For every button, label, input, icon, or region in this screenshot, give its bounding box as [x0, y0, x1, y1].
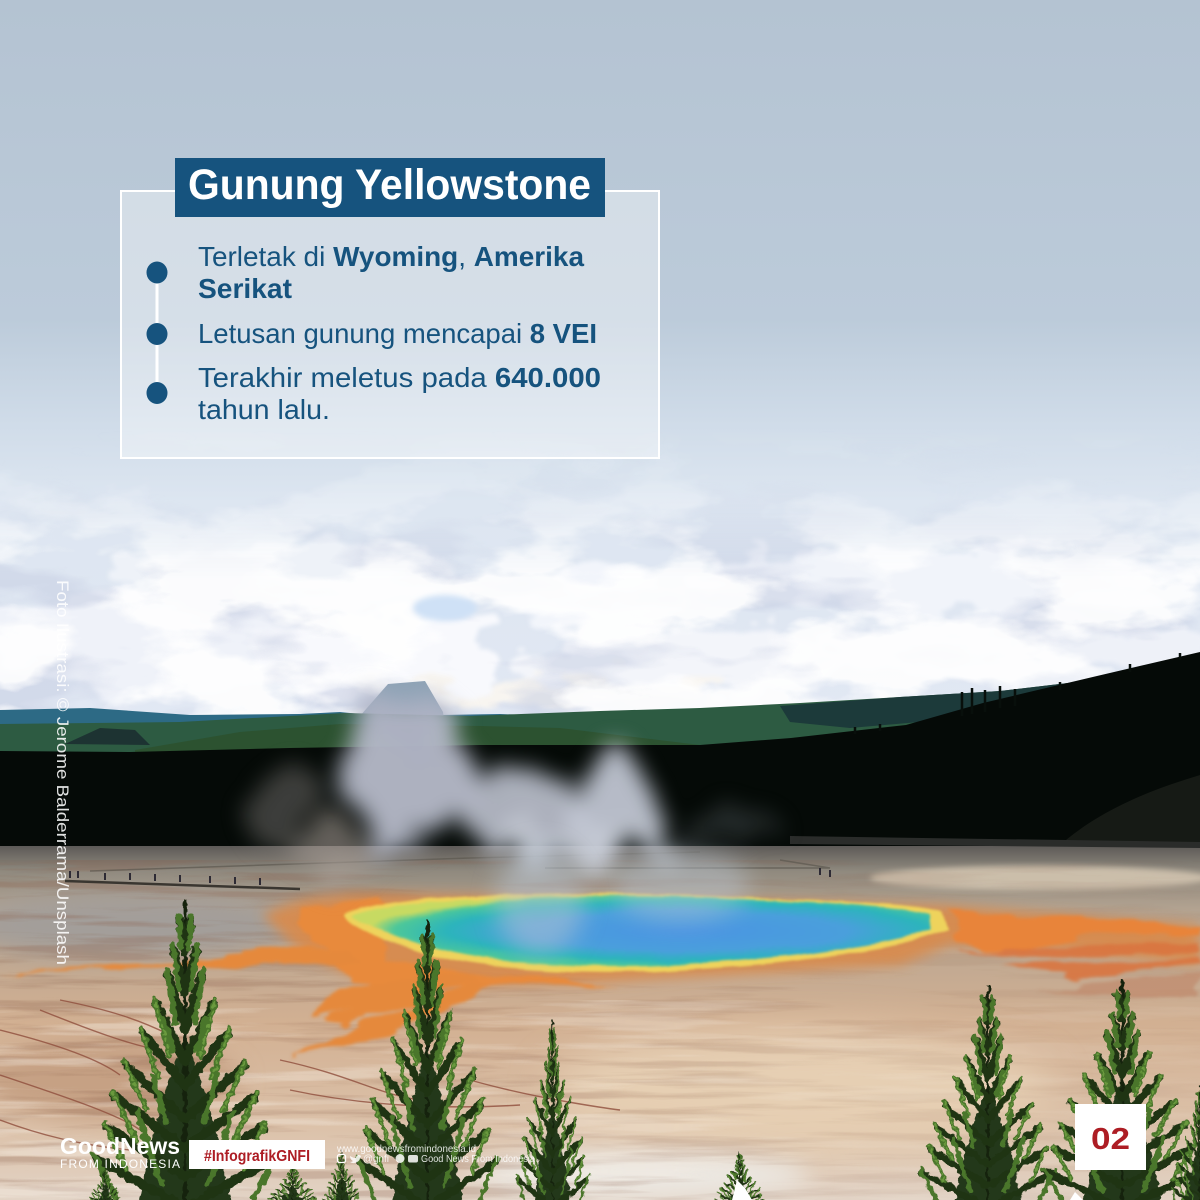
hashtag badge: #InfografikGNFI [204, 1148, 310, 1165]
timeline bullets [146, 262, 168, 404]
dark forest [0, 652, 1200, 854]
green hills [0, 681, 1085, 800]
page number [1075, 1104, 1146, 1170]
steam plumes [253, 699, 770, 890]
social links [336, 1143, 535, 1165]
icon: instagram [338, 1154, 346, 1162]
fact: eruption scale: Letusan gunung mencapai 8 VEI [198, 318, 597, 349]
fact: last eruption [198, 362, 601, 425]
footer logo [60, 1133, 180, 1171]
card frame [121, 191, 659, 458]
sky [0, 0, 1200, 760]
photo background: Grand Prismatic Spring [0, 325, 1200, 1200]
fact: location [198, 241, 584, 304]
icon: twitter [350, 1155, 361, 1163]
fact: last eruption: tahun lalu. [198, 394, 330, 425]
fact: location: Terletak di Wyoming, Amerika [198, 241, 584, 272]
hashtag badge [189, 1140, 325, 1169]
steam veil over pool [495, 845, 750, 955]
orange bacterial mat [0, 893, 1200, 1060]
ground [0, 846, 1200, 1200]
far dark boardwalk on right [790, 836, 1200, 848]
footer logo: GoodNews [60, 1133, 180, 1159]
icon: facebook [396, 1154, 404, 1163]
distant blue hills [0, 708, 555, 760]
icon: youtube [408, 1155, 418, 1162]
boardwalks and visitors [65, 852, 830, 889]
runoff streak lines [0, 1000, 620, 1150]
fact: location: Serikat [198, 273, 292, 304]
footer logo: FROM INDONESIA [60, 1157, 180, 1171]
photo credit: Foto Ilustrasi: © Jerome Balderrama/Unsplash [53, 580, 72, 965]
social links: Good News From Indonesia [421, 1153, 535, 1165]
prismatic pool [345, 893, 948, 972]
social links: @gnfi [363, 1153, 389, 1165]
panel: info card [121, 158, 659, 458]
page number: 02 [1091, 1121, 1130, 1156]
fact: last eruption: Terakhir meletus pada 640.000 [198, 362, 601, 393]
ground texture [0, 860, 1200, 1200]
title banner: Gunung Yellowstone [188, 161, 591, 209]
foreground pine trees [89, 900, 1200, 1200]
social links: www.goodnewsfromindonesia.id [336, 1143, 476, 1155]
bright and pale patches on the ground [0, 866, 1200, 1199]
clouds [0, 494, 1200, 715]
butte [360, 681, 444, 720]
